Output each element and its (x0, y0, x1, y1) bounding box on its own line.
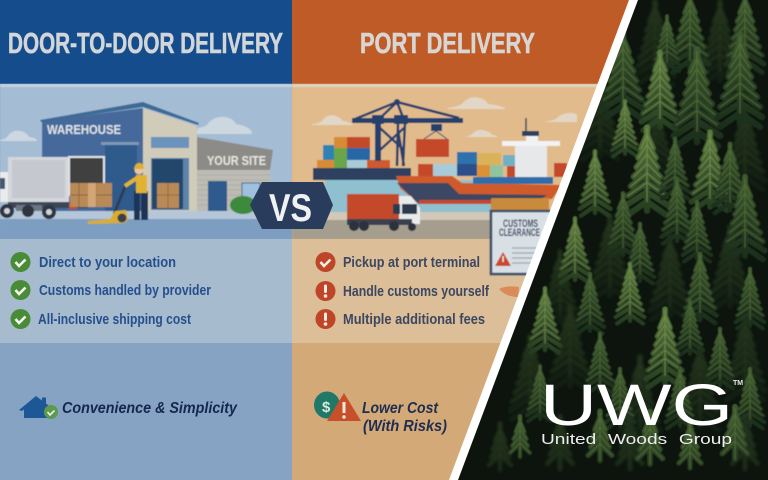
building: warehouse (40, 102, 199, 211)
item: pickup at port terminal (316, 252, 480, 272)
list band: door-to-door benefits (0, 239, 292, 343)
logo: United Woods Group: UWG (540, 373, 733, 438)
illustration: warehouse scene (0, 84, 292, 239)
building: warehouse: WAREHOUSE (47, 122, 121, 137)
logo: United Woods Group (540, 373, 743, 448)
item: all-inclusive shipping cost (10, 309, 191, 329)
item: multiple additional fees (316, 309, 485, 329)
logo: United Woods Group: United Woods Group (541, 431, 732, 448)
tagline: lower cost with risks: Lower Cost (362, 400, 439, 417)
list band: port drawbacks (292, 239, 552, 343)
item: customs handled by provider (10, 280, 211, 300)
dock with containers (313, 137, 411, 180)
icon: house with check (19, 396, 58, 419)
building: your site (197, 137, 273, 214)
item: handle customs yourself: Handle customs yourself (343, 283, 490, 300)
item: direct to your location: Direct to your location (39, 254, 176, 271)
panel: port delivery (292, 0, 652, 480)
pallet jack (88, 187, 128, 224)
crates on pallet (70, 183, 112, 207)
tagline: lower cost with risks (362, 400, 447, 435)
red delivery truck (347, 194, 420, 231)
header band: door-to-door (0, 0, 292, 84)
worker (125, 163, 148, 220)
item: multiple additional fees: Multiple additional fees (343, 311, 485, 328)
water (325, 180, 515, 232)
heading: port delivery: PORT DELIVERY (360, 28, 535, 60)
logo: United Woods Group: TM (733, 380, 743, 387)
icon: hand (499, 286, 519, 297)
customs clearance sign: CLEARANCE (499, 227, 540, 239)
hanging container (416, 139, 449, 157)
truck (0, 156, 105, 219)
item: customs handled by provider: Customs handled by provider (39, 282, 211, 299)
VS badge: VS (269, 187, 312, 230)
photo: aerial forest (450, 0, 768, 480)
customs clearance sign (491, 198, 551, 274)
item: pickup at port terminal: Pickup at port terminal (343, 254, 480, 271)
ground (292, 212, 507, 223)
panel: door-to-door delivery (0, 0, 292, 480)
crane (352, 99, 463, 166)
item: handle customs yourself (316, 281, 490, 301)
VS badge (250, 182, 333, 230)
item: direct to your location (10, 252, 176, 272)
icon: coin and warning triangle: $ (322, 399, 331, 416)
heading: door-to-door delivery: DOOR-TO-DOOR DELIVERY (8, 28, 283, 60)
cargo ship (396, 118, 567, 204)
customs clearance sign: CUSTOMS (503, 218, 538, 230)
item: all-inclusive shipping cost: All-inclusive shipping cost (38, 311, 191, 328)
diagonal white divider (449, 0, 638, 480)
tagline: convenience and simplicity: Convenience & Simplicity (62, 400, 238, 417)
illustration: port scene (292, 84, 652, 239)
building: your site: YOUR SITE (207, 154, 266, 168)
tagline: lower cost with risks: (With Risks) (363, 418, 447, 435)
header band: port (292, 0, 652, 84)
icon: coin and warning triangle (314, 392, 361, 421)
